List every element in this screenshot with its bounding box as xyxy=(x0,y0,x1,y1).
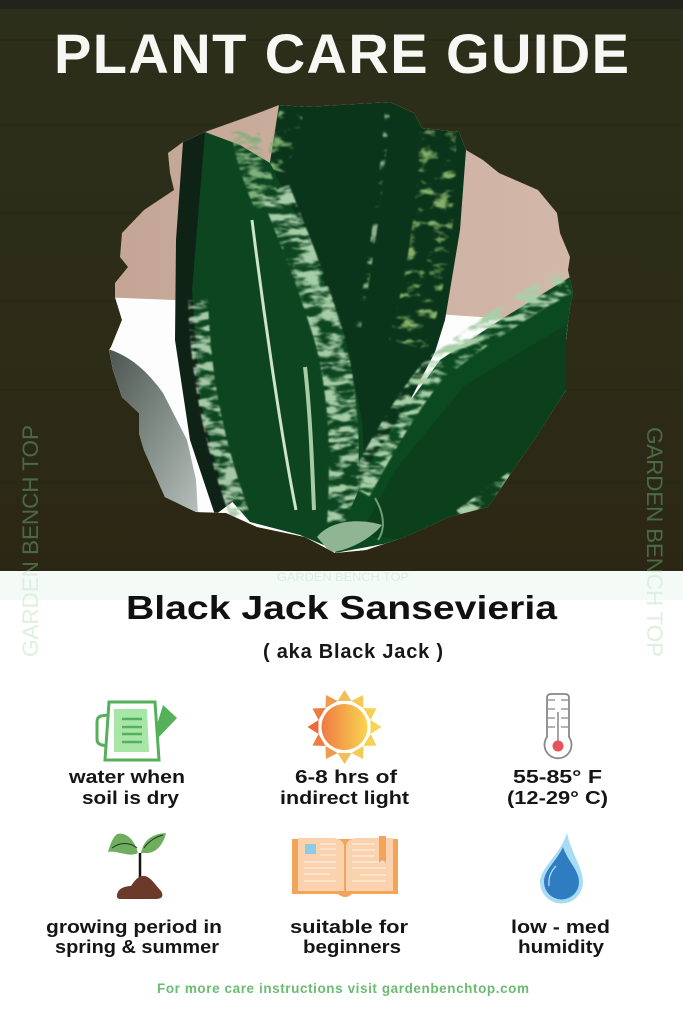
plant name: Black Jack Sansevieria xyxy=(126,589,558,626)
care item: humidity xyxy=(511,833,610,957)
label: light: indirect light xyxy=(280,788,409,808)
watermark: right vertical: GARDEN BENCH TOP xyxy=(642,427,667,657)
icon: sun xyxy=(308,690,382,764)
plant alias: ( aka Black Jack ) xyxy=(263,641,443,663)
white info panel xyxy=(0,571,683,1024)
main left leaf xyxy=(192,130,366,552)
care item: temperature xyxy=(507,694,608,808)
care item: growing period xyxy=(46,833,222,957)
icon: open book xyxy=(292,836,398,897)
background: dark wood panel xyxy=(0,0,683,571)
title: PLANT CARE GUIDE xyxy=(54,22,629,85)
label: temperature: (12-29° C) xyxy=(507,788,608,808)
care item: light xyxy=(280,690,409,808)
centre back leaf xyxy=(268,102,466,476)
photo: sansevieria plant in torn-edge blob xyxy=(109,102,573,553)
label: water: soil is dry xyxy=(82,788,179,808)
label: difficulty: beginners xyxy=(303,937,401,957)
care item: water xyxy=(68,702,185,808)
label: growing period: growing period in xyxy=(46,917,222,937)
watermark: centre: GARDEN BENCH TOP xyxy=(277,570,409,584)
label: light: 6-8 hrs of xyxy=(295,767,398,787)
label: humidity: low - med xyxy=(511,917,610,937)
icon: thermometer xyxy=(545,694,572,758)
label: temperature: 55-85° F xyxy=(513,767,602,787)
icon: watering can xyxy=(97,702,177,760)
icon: sprout xyxy=(108,833,166,899)
narrow dark far-left leaf xyxy=(175,132,235,515)
footer link: For more care instructions visit gardenbenchtop.com xyxy=(157,981,529,996)
icon: water drop xyxy=(540,833,583,904)
small bottom leaf xyxy=(317,521,382,552)
label: growing period: spring & summer xyxy=(55,937,219,957)
label: humidity: humidity xyxy=(518,937,604,957)
right leaf xyxy=(335,272,578,553)
watermark: left vertical: GARDEN BENCH TOP xyxy=(18,425,43,657)
label: water: water when xyxy=(68,767,185,787)
label: difficulty: suitable for xyxy=(290,917,408,937)
care item: difficulty xyxy=(290,836,408,957)
grey pot xyxy=(109,350,198,512)
